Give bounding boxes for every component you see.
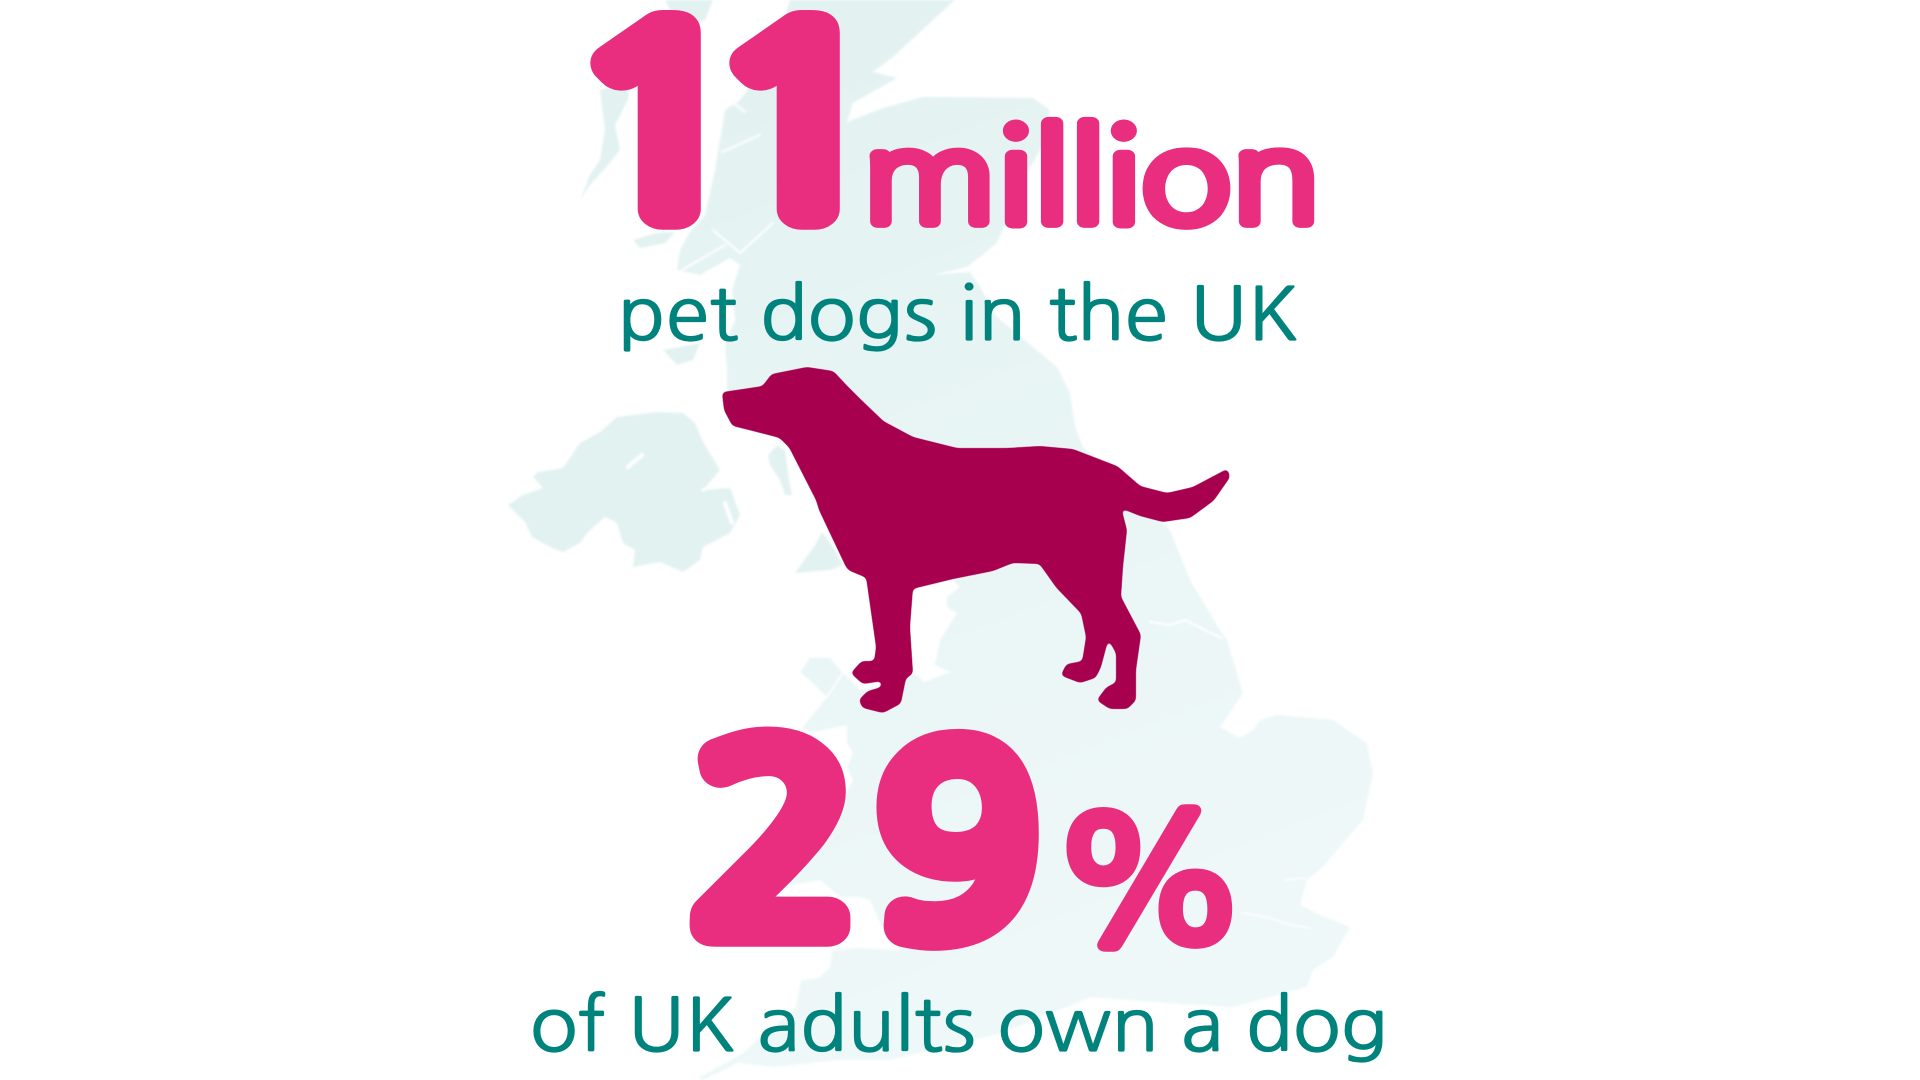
number: 11 (569, 0, 890, 248)
word: million: m (862, 115, 977, 242)
number: 29 percent (692, 719, 1249, 968)
map: Hebrides and islands (580, 0, 843, 573)
map: Ireland north (508, 412, 740, 572)
caption: pet dogs in the UK: i (959, 275, 978, 348)
number: 29 percent: 2 (692, 719, 857, 965)
word: million: i (1105, 110, 1141, 237)
word: million: on (1141, 115, 1321, 242)
word: million: i (997, 110, 1033, 237)
caption: pet dogs in the UK: n the UK (978, 278, 1298, 351)
number: 29 percent: % (1050, 796, 1249, 968)
caption: of UK adults own a dog: of UK adults own a dog (530, 989, 1388, 1062)
map: United Kingdom background (508, 0, 1373, 1080)
word: million: ll (1033, 115, 1105, 242)
caption: pet dogs in the UK: pet dogs (618, 278, 913, 351)
map: Great Britain (677, 0, 1373, 1080)
icon: dog silhouette (723, 368, 1229, 712)
number: 29 percent: 9 (879, 722, 1036, 967)
number: 11: 1 (569, 0, 751, 248)
map: coastal inlets (628, 100, 1310, 928)
number: 11: 1 (708, 0, 890, 248)
